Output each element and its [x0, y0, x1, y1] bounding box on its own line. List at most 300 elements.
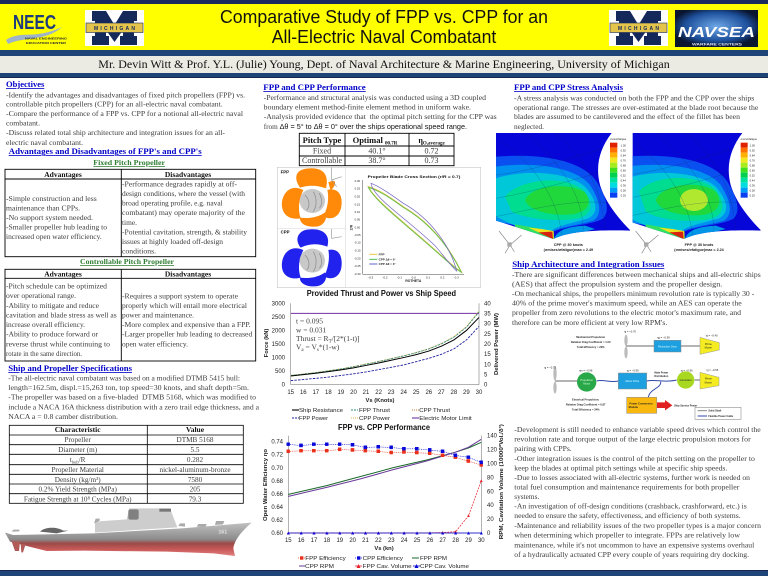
text: architecture intro: 40% of the prime mover's maximum speed, while an AES can operate the — [512, 298, 742, 308]
chart: provided thrust and power vs ship speed: CPP Power — [359, 416, 390, 422]
chart: provided thrust and power vs ship speed: CPP Thrust — [419, 408, 450, 414]
text: performance: from Δθ = 5° to Δθ = 0° over the ships operational speed range. — [264, 122, 467, 131]
chart: provided thrust and power vs ship speed: /[2*(1-t)] — [332, 334, 360, 343]
chart: FPP vs CPP performance: Open Water Efficiency ηo — [263, 449, 269, 521]
chart: provided thrust and power vs ship speed: 30 — [476, 390, 483, 396]
chart: provided thrust and power vs ship speed: s — [317, 348, 319, 353]
icon: FPP propeller — [281, 168, 342, 227]
table: pitch type: Pitch Type — [303, 135, 342, 145]
chart: provided thrust and power vs ship speed: 23 — [388, 390, 395, 396]
chart: provided thrust and power vs ship speed: 30 — [484, 322, 491, 328]
chart: propeller blade cross section: ROTHETA — [405, 279, 422, 283]
chart: FPP vs CPP performance: 40 — [487, 503, 494, 509]
table: propeller characteristics: 5.5 — [191, 446, 200, 454]
chart: propeller blade cross section: 0.25 — [355, 187, 361, 191]
footer band — [0, 570, 768, 576]
chart: provided thrust and power vs ship speed: a — [301, 348, 304, 353]
chart: provided thrust and power vs ship speed: V — [296, 343, 301, 352]
chart: FPP vs CPP performance: 120 — [487, 448, 498, 454]
text: performance: -Performance and structural analysis was conducted using a 3D coupled — [264, 93, 486, 102]
chart: provided thrust and power vs ship speed: Electric Motor Limit — [419, 416, 472, 422]
chart: FPP vs CPP performance: 20 — [349, 538, 357, 544]
chart: FPP vs CPP performance: 18 — [324, 538, 331, 544]
table: pitch type: θ0.7R — [385, 142, 398, 146]
table: controllable pitch propeller: -Pitch schedule can be optimized — [6, 282, 107, 290]
table: controllable pitch propeller: rotate in the same direction. — [6, 349, 82, 358]
illustration: naval combatant ship — [5, 508, 252, 556]
table: propeller characteristics: Propeller Material — [51, 466, 104, 474]
chart: provided thrust and power vs ship speed: 25 — [413, 390, 420, 396]
chart: propeller blade cross section: 0.15 — [355, 202, 361, 206]
chart: provided thrust and power vs ship speed: Delivered Power (MW) — [494, 313, 500, 375]
chart: FPP vs CPP performance: RPM, Cavitation Volume (10000*Vol./δ³) — [498, 424, 505, 539]
table: propeller characteristics: 0.2% Yield Strength (MPa) — [39, 486, 117, 494]
chart: FPP vs CPP performance: 27 — [439, 538, 447, 544]
text: development and integration notes: maintenance, while it's not uncommon to have an expensive systems overhaul — [514, 540, 754, 550]
table: controllable pitch propeller: reverse thrust while continuing to — [6, 340, 110, 348]
table: controllable pitch propeller: properly which will entail more electrical — [122, 301, 247, 310]
chart: propeller blade cross section: 0.10 — [355, 210, 361, 214]
text: development and integration notes: -Maintenance and reliability issues of the two propeller types is a major concern — [514, 521, 761, 530]
diagram: electrical propulsion: Motor — [583, 382, 590, 386]
diagram: mechanical propulsion: Prime — [705, 342, 712, 346]
table: fixed pitch propeller: conditions. — [122, 246, 156, 256]
table: fixed pitch propeller: Disadvantages — [165, 170, 211, 179]
chart: CPP stress contour at 30 knots: 0.44 — [621, 178, 626, 182]
diagram: electrical propulsion: Relative Drag Coefficient = 0.87 — [566, 402, 606, 406]
chart: FPP stress contour at 30 knots: 0.76 — [750, 158, 755, 162]
chart: CPP stress contour at 30 knots: 0.52 — [621, 173, 626, 177]
table: fixed pitch propeller: design conditions, where the vessel (with — [122, 189, 245, 198]
heading: ship architecture and integration issues: Ship Architecture and Integration Issues — [512, 260, 664, 269]
legend: shaft and cable — [695, 407, 741, 419]
chart: propeller blade cross section: -0.25 — [354, 264, 361, 268]
chart: FPP vs CPP performance: 80 — [487, 475, 494, 481]
logo: Michigan left — [85, 10, 144, 46]
chart: provided thrust and power vs ship speed: 22 — [375, 390, 383, 396]
diagram: mechanical propulsion: ηg = ~0.99 — [657, 336, 670, 340]
chart: provided thrust and power vs ship speed: 26 — [425, 390, 433, 396]
table: fixed pitch propeller: issues at highly loaded off-design — [122, 237, 223, 246]
heading: FPP and CPP performance: FPP and CPP Performance — [263, 83, 366, 92]
chart: FPP vs CPP performance: 0.60 — [271, 531, 284, 537]
diagram: mechanical propulsion: Mechanical Propulsion — [576, 335, 606, 339]
chart: FPP vs CPP performance: FPP vs. CPP Performance — [338, 423, 431, 432]
table: controllable pitch propeller — [5, 269, 256, 361]
chart: FPP stress contour at 30 knots: 0.20 — [750, 193, 755, 197]
illustration: naval combatant ship: 161 — [218, 529, 227, 535]
chart: provided thrust and power vs ship speed — [264, 289, 500, 422]
table: propeller characteristics: t — [70, 456, 72, 464]
chart: CPP stress contour at 30 knots: 0.76 — [621, 158, 626, 162]
chart: propeller blade cross section: -0.20 — [354, 256, 361, 260]
chart: provided thrust and power vs ship speed: 35 — [484, 312, 491, 318]
authors subtitle: Mr. Devin Witt & Prof. Y.L. (Julie) Young, Dept. of Naval Architecture & Marine Engineering, University of Michigan — [98, 59, 670, 71]
table: propeller characteristics: Fatigue Strength at 10⁸ Cycles (MPa) — [24, 496, 132, 504]
chart: CPP stress contour at 30 knots: CPP @ 30 knots — [554, 243, 583, 247]
chart: provided thrust and power vs ship speed: = V — [304, 343, 318, 352]
chart: FPP vs CPP performance: FPP Efficiency — [305, 556, 346, 562]
table: fixed pitch propeller: maintenance than CPPs. — [6, 204, 80, 212]
chart: FPP vs CPP performance: 29 — [465, 538, 472, 544]
text: development and integration notes: total fuel consumption and maintenance requirements for both propeller — [514, 482, 740, 492]
chart: provided thrust and power vs ship speed: 21 — [363, 390, 370, 396]
diagram: electrical propulsion: ηj = ~0.55 — [706, 368, 719, 372]
chart: FPP stress contour at 30 knots: 0.36 — [750, 183, 755, 187]
chart: CPP stress contour at 30 knots: 0.84 — [621, 153, 626, 157]
table: propeller characteristics: 0.282 — [187, 456, 203, 464]
text: objectives: controllable pitch propellers (CPP) for an all-electric naval combatant. — [6, 100, 223, 108]
chart: propeller blade cross section: 0.0 — [412, 275, 416, 279]
table: propeller characteristics — [9, 425, 243, 504]
diagram: mechanical propulsion: ηj = ~0.70 — [624, 330, 636, 334]
diagram: electrical propulsion: ηj = ~0.96 — [681, 368, 693, 372]
diagram: electrical propulsion: Power Conversion — [629, 401, 653, 405]
diagram: electrical propulsion: Generator — [680, 378, 692, 382]
table: fixed pitch propeller: time. — [122, 218, 137, 227]
chart: FPP stress contour at 30 knots: 0.28 — [750, 188, 755, 192]
table: propeller characteristics: Diameter (m) — [58, 446, 98, 454]
logo: Michigan right: MICHIGAN — [618, 26, 659, 32]
text: development and integration notes: -An investigation of off-design conditions (crashback, crashforward, etc.) is — [514, 502, 747, 510]
chart: provided thrust and power vs ship speed: 0 — [282, 383, 286, 389]
table: controllable pitch propeller: -Ability to mitigate and reduce — [6, 301, 100, 310]
text: objectives: -Discuss related total ship architecture and integration issues for an all- — [6, 128, 226, 137]
chart: FPP vs CPP performance: 100 — [487, 462, 498, 468]
table: fixed pitch propeller: combatant) may operate majority of the — [122, 208, 246, 217]
chart: FPP vs CPP performance: 60 — [487, 489, 494, 495]
text: specifications: length=162.5m, displ.=15,263 ton, top speed=30 knots, and shaft depth=5m. — [8, 383, 249, 392]
diagram: electrical propulsion: Ship Service Power — [674, 404, 697, 407]
text: architecture intro: -On mechanical ships, the propellers minimum revolution rate is typically 30 - — [512, 289, 755, 298]
text: development and integration notes: keep the blades at optimal pitch settings while at specific ship speeds. — [514, 464, 727, 472]
table: propeller characteristics: Density (kg/m³) — [55, 476, 101, 484]
text: specifications: -The propeller was based on a five-bladed DTMB 5168, which was modified to — [8, 392, 256, 402]
chart: propeller blade cross section: -0.2 — [382, 275, 388, 279]
chart: provided thrust and power vs ship speed: *(1-w) — [319, 343, 340, 352]
text: development and integration notes: -Due to losses associated with all-electric systems, further work is needed on — [514, 473, 750, 482]
icon: FPP propeller: FPP — [281, 170, 289, 175]
chart: FPP stress contour at 30 knots: 0.92 — [750, 148, 755, 152]
diagram: mechanical propulsion: Relative Drag Coefficient = 1.00 — [571, 340, 611, 344]
diagram: electrical propulsion: Electrical Propulsion: — [572, 397, 599, 401]
icon: CPP propeller — [281, 229, 342, 286]
table: pitch type: 40.1° — [368, 146, 386, 156]
chart: provided thrust and power vs ship speed: Force (kN) — [264, 329, 270, 357]
text: development and integration notes: needed to ensure the safety, effectiveness, and efficiency of both systems. — [514, 511, 741, 520]
chart: propeller blade cross section: CPP Δθ = 3° — [379, 262, 396, 266]
chart: propeller blade cross section: FPP — [379, 252, 384, 256]
chart: CPP stress contour at 30 knots: 0.20 — [621, 193, 626, 197]
chart: propeller blade cross section: -0.3 — [368, 275, 374, 279]
diagram: electrical propulsion: Mover — [705, 380, 712, 384]
chart: provided thrust and power vs ship speed: Provided Thrust and Power vs Ship Speed — [307, 289, 456, 298]
table: propeller characteristics: 7580 — [188, 476, 203, 484]
text: development and integration notes: systems. — [514, 492, 539, 501]
table: controllable pitch propeller: power and maintenance. — [122, 310, 194, 320]
table: propeller characteristics: /R — [79, 456, 86, 464]
text: development and integration notes: -Other integration issues is the control of the pitch setting on the propeller to — [514, 454, 755, 463]
chart: propeller blade cross section: CPP Δθ = 0° — [379, 257, 396, 261]
table: pitch type: 0.72 — [424, 146, 438, 156]
table: fixed pitch propeller: -Smaller propeller hub leading to — [6, 222, 107, 232]
text: stress analysis — [514, 94, 759, 131]
table: fixed pitch propeller: -Simple construction and less — [6, 194, 97, 203]
chart: FPP vs CPP performance — [263, 423, 505, 570]
chart: FPP stress contour at 30 knots — [627, 133, 763, 254]
chart: FPP stress contour at 30 knots: σvon/σfatigue — [741, 137, 757, 141]
chart: FPP vs CPP performance: 21 — [362, 538, 369, 544]
text: performance — [264, 93, 497, 131]
logo: NAVSEA: NAVSEA — [678, 24, 755, 41]
chart: FPP stress contour at 30 knots: 0.44 — [750, 178, 755, 182]
table: propeller characteristics: DTMB 5168 — [177, 436, 214, 444]
table: pitch type: O,average — [423, 142, 445, 146]
chart: FPP vs CPP performance: 24 — [401, 538, 408, 544]
chart: FPP vs CPP performance: 20 — [487, 517, 494, 523]
logo: NEEC: EDUCATION CENTER — [26, 41, 66, 45]
chart: provided thrust and power vs ship speed: Vs (Knots) — [366, 398, 395, 404]
table: controllable pitch propeller: cavitation and blade stress as well as — [6, 310, 117, 320]
text: stress analysis: neglected. — [514, 122, 544, 131]
chart: FPP stress contour at 30 knots: 0.60 — [750, 168, 755, 172]
table: fixed pitch propeller: -Potential cavitation, strength, & stability — [122, 228, 247, 236]
subheading: controllable pitch propeller: Controllable Pitch Propeller — [80, 257, 175, 266]
chart: provided thrust and power vs ship speed: 40 — [484, 301, 491, 307]
chart: FPP vs CPP performance: FPP Cav. Volume — [363, 564, 412, 570]
chart: provided thrust and power vs ship speed: 2500 — [272, 315, 286, 321]
chart: FPP vs CPP performance: 0.64 — [271, 505, 284, 511]
panel: stress contours — [496, 133, 763, 254]
chart: FPP vs CPP performance: 28 — [452, 538, 460, 544]
diagram: electrical propulsion: Total Efficiency = 34% — [572, 407, 600, 411]
chart: FPP stress contour at 30 knots: FPP @ 30 knots — [685, 243, 713, 247]
chart: FPP stress contour at 30 knots: 0.68 — [750, 163, 755, 167]
table: controllable pitch propeller: -Ability to produce forward or — [6, 330, 98, 338]
text: architecture intro: therefore can be more efficient at very low RPM's. — [512, 318, 667, 327]
table: fixed pitch propeller: -Performance degrades rapidly at off- — [122, 180, 238, 188]
table: propeller characteristics: Value — [186, 425, 205, 434]
logo: NEEC: NEEC — [13, 12, 56, 34]
chart: provided thrust and power vs ship speed: 2000 — [272, 328, 286, 334]
text: architecture intro: propeller from zero revolutions to the electric motor's maximum rate, and — [512, 308, 741, 317]
text: specifications: NACA a = 0.8 camber distribution. — [8, 412, 118, 421]
chart: FPP vs CPP performance: 22 — [375, 538, 382, 544]
chart: CPP stress contour at 30 knots — [496, 133, 633, 254]
chart: FPP vs CPP performance: 0.72 — [271, 453, 284, 459]
table: controllable pitch propeller: -More complex and expensive than a FPP. — [122, 320, 251, 329]
text: performance: boundary element method-finite element method in uniform wake. — [264, 102, 471, 112]
text: architecture intro: -There are significant differences between mechanical ships and all-electric ships — [512, 270, 761, 279]
diagram: electrical propulsion: ηm = ~0.98 — [579, 368, 593, 372]
text: development and integration notes: when determining which propeller to integrate. FPPs are relatively low — [514, 530, 741, 540]
text: development and integration notes: of a hydraulically actuated CPP every couple of years requiring dry docking. — [514, 550, 749, 559]
text: development and integration notes: pairing with CPPs. — [514, 444, 572, 453]
chart: propeller blade cross section: 0.05 — [355, 218, 361, 222]
subheading: fixed pitch propeller: Fixed Pitch Propeller — [93, 158, 166, 167]
table: controllable pitch propeller: -Larger propeller hub leading to decreased — [122, 330, 253, 338]
table: fixed pitch propeller: Advantages — [44, 170, 82, 179]
chart: FPP vs CPP performance: 0 — [487, 531, 491, 537]
diagram: mechanical propulsion: ηj = ~0.40 — [706, 334, 718, 338]
header band — [0, 0, 768, 78]
chart: provided thrust and power vs ship speed: 5 — [484, 372, 488, 378]
text: development and integration notes: revolution rate and torque output of the large electric propulsion motors for — [514, 434, 751, 444]
chart: FPP vs CPP performance: 25 — [414, 538, 421, 544]
text: objectives: combatant. — [6, 118, 40, 128]
heading: advantages and disadvantages: Advantages and Disadvantages of FPP's and CPP's — [9, 147, 202, 156]
chart: provided thrust and power vs ship speed: 29 — [463, 390, 470, 396]
chart: FPP vs CPP performance: CPP Cav. Volume — [420, 564, 469, 570]
chart: provided thrust and power vs ship speed: 28 — [451, 390, 458, 396]
panel: propeller geometry and blade section — [277, 167, 481, 288]
chart: propeller blade cross section: -0.10 — [354, 241, 361, 245]
chart: FPP vs CPP performance: 0.74 — [271, 440, 284, 446]
chart: FPP vs CPP performance: 0.70 — [271, 466, 284, 472]
chart: FPP vs CPP performance: 19 — [336, 538, 344, 544]
logo: Michigan right — [609, 10, 668, 46]
text: development and integration notes: -Development is still needed to enhance variable speed drives which control the — [514, 425, 761, 434]
chart: propeller blade cross section: 0.20 — [355, 195, 361, 199]
table: controllable pitch propeller: -Requires a support system to operate — [122, 292, 239, 300]
heading: objectives: Objectives — [6, 80, 44, 89]
diagram: mechanical propulsion: Reduction Gear — [658, 344, 677, 348]
table: pitch type: η — [418, 136, 423, 145]
diagram: mechanical propulsion: Mover — [705, 346, 712, 350]
heading: stress analysis: FPP and CPP Stress Analysis — [514, 83, 623, 92]
chart: FPP vs CPP performance: 26 — [427, 538, 434, 544]
title — [220, 7, 548, 47]
table: fixed pitch propeller: increased open water efficiency. — [6, 232, 102, 241]
diagram: electrical propulsion — [544, 365, 719, 413]
chart: FPP vs CPP performance: 30 — [478, 538, 485, 544]
chart: provided thrust and power vs ship speed: 1000 — [272, 356, 286, 362]
text: specifications — [8, 374, 260, 421]
table: pitch type: 38.7° — [368, 156, 386, 165]
heading: ship and propeller specifications: Ship and Propeller Specifications — [8, 364, 132, 373]
table: controllable pitch propeller: open water efficiency. — [122, 340, 188, 348]
table: fixed pitch propeller — [5, 169, 256, 257]
chart: provided thrust and power vs ship speed: 19 — [338, 390, 345, 396]
icon: CPP propeller: CPP — [281, 230, 290, 235]
chart: provided thrust and power vs ship speed: 0 — [484, 383, 488, 389]
chart: provided thrust and power vs ship speed: 27 — [438, 390, 445, 396]
chart: CPP stress contour at 30 knots: (σmises/σfatigue)max = 2.49 — [544, 248, 593, 252]
chart: FPP vs CPP performance: Vs (kn) — [374, 546, 394, 552]
logo: NEEC: NAVAL ENGINEERING — [25, 36, 67, 40]
chart: provided thrust and power vs ship speed: 3000 — [272, 301, 286, 307]
chart: FPP vs CPP performance: 0.68 — [271, 479, 284, 485]
table: pitch type — [299, 133, 454, 166]
table: pitch type: Optimal — [353, 135, 383, 145]
chart: provided thrust and power vs ship speed: 10 — [484, 362, 491, 368]
chart: propeller blade cross section — [349, 175, 464, 283]
chart: provided thrust and power vs ship speed: 24 — [400, 390, 408, 396]
chart: CPP stress contour at 30 knots: 0.28 — [621, 188, 626, 192]
diagram: electrical propulsion: Propulsion — [580, 378, 593, 382]
chart: FPP stress contour at 30 knots: 1.00 — [750, 143, 755, 147]
chart: propeller blade cross section: 0.1 — [426, 275, 430, 279]
table: propeller characteristics: nickel-aluminum-bronze — [159, 466, 231, 474]
chart: provided thrust and power vs ship speed: 500 — [275, 369, 286, 375]
table: fixed pitch propeller: broad operating profile, e.g. naval — [122, 198, 223, 208]
table: propeller characteristics: 79.3 — [189, 496, 202, 504]
title: Comparative Study of FPP vs. CPP for an — [220, 7, 548, 27]
chart: provided thrust and power vs ship speed: 20 — [350, 390, 357, 396]
chart: propeller blade cross section: Z/R — [349, 224, 353, 230]
chart: provided thrust and power vs ship speed: 1500 — [272, 342, 286, 348]
chart: provided thrust and power vs ship speed: t = 0.095 — [296, 317, 323, 326]
chart: provided thrust and power vs ship speed: 18 — [325, 390, 332, 396]
chart: propeller blade cross section: 0.2 — [440, 275, 445, 279]
table: controllable pitch propeller: Advantages — [44, 270, 82, 278]
logo: NEEC — [6, 12, 67, 45]
chart: CPP stress contour at 30 knots: 1.00 — [621, 143, 626, 147]
legend: shaft and cable: Flexible Power Cable — [708, 415, 734, 418]
chart: CPP stress contour at 30 knots: 0.36 — [621, 183, 626, 187]
table: propeller characteristics: hub — [72, 460, 79, 464]
text: development and integration notes — [514, 425, 761, 559]
diagram: electrical propulsion: ηj = ~0.99 — [627, 369, 639, 373]
chart: provided thrust and power vs ship speed: 16 — [300, 390, 307, 396]
chart: propeller blade cross section: 0.30 — [355, 179, 361, 183]
chart: propeller blade cross section: 0.3 — [455, 275, 459, 279]
text: specifications: -The all-electric naval combatant was based on a modified DTMB 5415 hull: — [8, 374, 240, 382]
legend: shaft and cable: Solid Shaft — [708, 410, 721, 413]
text: performance: -Analysis provided evidence that the optimal pitch setting for the CPP was — [264, 112, 497, 121]
chart: propeller blade cross section: -0.15 — [354, 249, 361, 253]
chart: propeller blade cross section: -0.1 — [397, 275, 402, 279]
diagram: mechanical propulsion: Total Efficiency = 22% — [577, 345, 605, 349]
chart: FPP stress contour at 30 knots: (σmises/σfatigue)max = 2.24 — [674, 248, 725, 252]
chart: provided thrust and power vs ship speed: Ship Resistance — [299, 408, 343, 414]
text: architecture intro — [512, 270, 761, 327]
logo: NAVSEA — [675, 10, 758, 47]
diagram: electrical propulsion: Prime — [705, 377, 712, 381]
text: stress analysis: blades are assumed to be cantilevered and the effect of the fillet has been — [514, 112, 740, 121]
table: pitch type: 0.73 — [424, 156, 438, 165]
chart: FPP vs CPP performance: 0.62 — [271, 518, 284, 524]
chart: FPP stress contour at 30 knots: 0.84 — [750, 153, 755, 157]
chart: provided thrust and power vs ship speed: 17 — [312, 390, 320, 396]
diagram: electrical propulsion: Main Power — [654, 371, 668, 374]
table: pitch type: Controllable — [302, 156, 342, 165]
table: propeller characteristics: Propeller — [65, 436, 91, 444]
table: controllable pitch propeller: over operational range. — [6, 291, 76, 300]
chart: FPP vs CPP performance: 16 — [298, 538, 305, 544]
diagram: mechanical propulsion — [571, 330, 719, 358]
table: propeller characteristics: 205 — [190, 486, 201, 494]
chart: CPP stress contour at 30 knots: σvon/σfatigue — [610, 137, 627, 141]
chart: CPP stress contour at 30 knots: 0.60 — [621, 168, 626, 172]
table: controllable pitch propeller: Disadvantages — [165, 270, 211, 278]
chart: CPP stress contour at 30 knots: 0.92 — [621, 148, 626, 152]
text: objectives: -Identify the advantages and disadvantages of fixed pitch propellers (FPP) vs. — [6, 90, 245, 100]
chart: provided thrust and power vs ship speed: 25 — [484, 332, 491, 338]
chart: provided thrust and power vs ship speed: FPP Thrust — [359, 408, 390, 414]
table: propeller characteristics: Characteristic — [55, 425, 101, 434]
logo: Michigan left: MICHIGAN — [94, 26, 135, 32]
diagram: mechanical vs electrical propulsion — [544, 330, 741, 419]
chart: FPP vs CPP performance: 23 — [388, 538, 395, 544]
chart: propeller blade cross section: -0.05 — [354, 233, 361, 237]
text: architecture intro: (AES) that affect the propulsion system and the propeller design. — [512, 280, 722, 288]
logo: NAVSEA: WARFARE CENTERS — [692, 42, 743, 46]
chart: FPP vs CPP performance: FPP RPM — [420, 556, 447, 562]
chart: provided thrust and power vs ship speed: T — [329, 340, 332, 344]
text: stress analysis: operational range. The stresses are over-estimated at the blade root because the — [514, 103, 759, 112]
chart: provided thrust and power vs ship speed: FPP Power — [299, 416, 328, 422]
